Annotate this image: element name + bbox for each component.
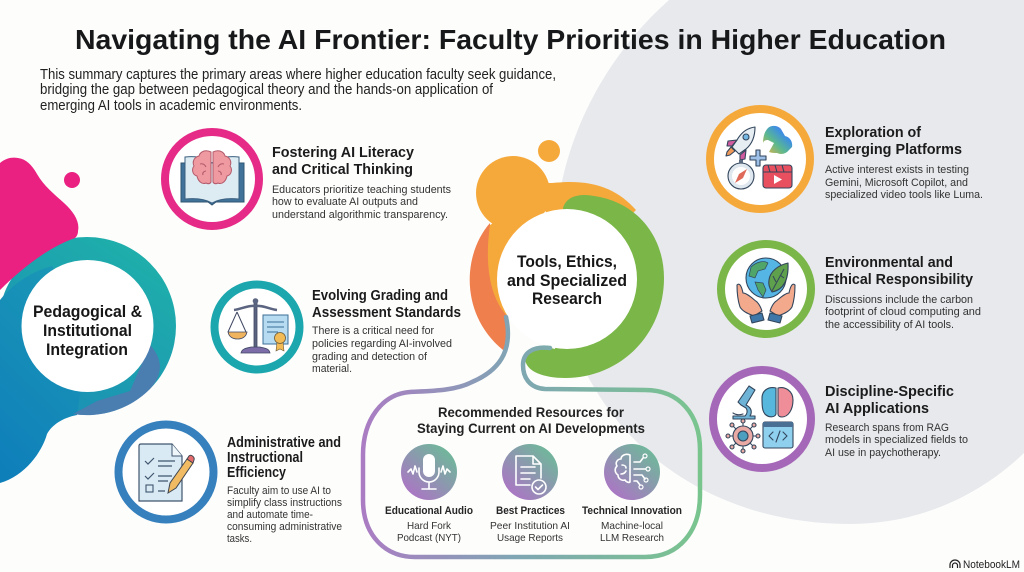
card: Discipline-Specific AI Applications: AI use in paychotherapy.	[825, 447, 941, 459]
card: Administrative Efficiency: Efficiency	[227, 465, 286, 481]
card: Discipline-Specific AI Applications: Research spans from RAG	[825, 422, 949, 434]
card: Fostering AI Literacy: Educators prioritize teaching students	[272, 184, 451, 196]
card: Administrative Efficiency: Instructional	[227, 450, 303, 466]
icon: globe, leaf and hands	[721, 244, 811, 334]
resource: educational audio	[385, 444, 473, 544]
card: Evolving Grading: material.	[312, 363, 352, 375]
resource: best practices	[490, 444, 570, 544]
card: Exploration of Emerging Platforms: specialized video tools like Luma.	[825, 189, 983, 201]
card: Exploration of Emerging Platforms: Emerging Platforms	[825, 142, 962, 158]
card: Discipline-Specific AI Applications	[713, 370, 968, 468]
resource: best practices: Best Practices	[496, 505, 565, 517]
card: Administrative Efficiency: consuming administrative	[227, 521, 342, 533]
card: Fostering AI Literacy: how to evaluate AI outputs and	[272, 196, 418, 208]
resource: technical innovation: Technical Innovation	[582, 505, 682, 517]
panel heading: Recommended Resources for	[438, 405, 625, 420]
hub: Tools, Ethics, and Specialized Research: and Specialized	[507, 271, 627, 290]
card: Exploration of Emerging Platforms: Exploration of	[825, 125, 921, 141]
resource: technical innovation: LLM Research	[600, 532, 664, 544]
card: Environmental and Ethical Responsibility	[721, 244, 981, 334]
card: Fostering AI Literacy	[165, 132, 451, 226]
hub: Pedagogical & Institutional Integration: Integration	[46, 340, 128, 359]
intro text	[40, 67, 556, 114]
card: Administrative Efficiency: simplify class instructions	[227, 497, 342, 509]
card: Administrative Efficiency: Faculty aim to use AI to	[227, 485, 331, 497]
title: Navigating the AI Frontier: Faculty Priorities in Higher Education	[75, 24, 946, 55]
resource: educational audio: Podcast (NYT)	[397, 532, 461, 544]
card: Discipline-Specific AI Applications: models in specialized fields to	[825, 434, 968, 446]
hub: Tools, Ethics, and Specialized Research	[470, 140, 664, 378]
resource: best practices: Peer Institution AI	[490, 520, 570, 532]
icon: brain and book	[165, 132, 259, 226]
card: Evolving Grading: grading and detection of	[312, 351, 428, 363]
resource: best practices: Usage Reports	[497, 532, 563, 544]
card: Discipline-Specific AI Applications: Discipline-Specific	[825, 384, 954, 400]
card: Environmental and Ethical Responsibility: Discussions include the carbon	[825, 294, 973, 306]
panel heading: Staying Current on AI Developments	[417, 421, 645, 436]
card: Administrative Efficiency	[118, 424, 342, 545]
card: Administrative Efficiency: tasks.	[227, 533, 252, 545]
card: Environmental and Ethical Responsibility: Environmental and	[825, 255, 953, 271]
resource: educational audio: Hard Fork	[407, 520, 452, 532]
gray backdrop shape	[556, 0, 1024, 524]
card: Environmental and Ethical Responsibility: Ethical Responsibility	[825, 272, 973, 288]
intro text: emerging AI tools in academic environments.	[40, 98, 302, 114]
resource: educational audio: Educational Audio	[385, 505, 473, 517]
watermark: NotebookLM: NotebookLM	[963, 559, 1020, 571]
card: Environmental and Ethical Responsibility: the accessibility of AI tools.	[825, 319, 954, 331]
card: Environmental and Ethical Responsibility: footprint of cloud computing and	[825, 306, 981, 318]
hub: Tools, Ethics, and Specialized Research: Tools, Ethics,	[517, 252, 617, 271]
hub: Pedagogical & Institutional Integration: Institutional	[43, 321, 132, 340]
panel outline connector	[363, 317, 700, 557]
icon: checklist and pencil	[118, 424, 214, 520]
card: Evolving Grading: policies regarding AI-involved	[312, 338, 452, 350]
intro text: bridging the gap between pedagogical theory and the hands-on application of	[40, 82, 494, 98]
card: Evolving Grading	[214, 284, 461, 375]
card: Administrative Efficiency: and automate time-	[227, 509, 313, 521]
intro text: This summary captures the primary areas where higher education faculty seek guidance,	[40, 67, 556, 83]
icon: scales and certificate	[214, 284, 300, 370]
card: Exploration of Emerging Platforms: Gemini, Microsoft Copilot, and	[825, 177, 968, 189]
resource: technical innovation: Machine-local	[601, 520, 663, 532]
card: Fostering AI Literacy: understand algorithmic transparency.	[272, 209, 448, 221]
hub: Tools, Ethics, and Specialized Research: Research	[532, 289, 602, 308]
card: Fostering AI Literacy: and Critical Thinking	[272, 162, 413, 178]
card: Discipline-Specific AI Applications: AI Applications	[825, 401, 929, 417]
card: Fostering AI Literacy: Fostering AI Literacy	[272, 145, 414, 161]
card: Evolving Grading: Assessment Standards	[312, 305, 461, 321]
resource: technical innovation	[582, 444, 682, 544]
card: Exploration of Emerging Platforms	[710, 109, 983, 209]
icon: rocket, copilot, compass, video	[710, 109, 810, 209]
hub: Pedagogical & Institutional Integration: Pedagogical &	[33, 302, 142, 321]
card: Administrative Efficiency: Administrative and	[227, 435, 341, 451]
card: Evolving Grading: Evolving Grading and	[312, 288, 448, 304]
hub: Pedagogical & Institutional Integration	[0, 158, 176, 483]
panel: recommended resources	[363, 317, 700, 557]
icon: microscope, brain, network, code	[713, 370, 811, 468]
card: Evolving Grading: There is a critical need for	[312, 325, 434, 337]
card: Exploration of Emerging Platforms: Active interest exists in testing	[825, 164, 969, 176]
panel heading	[417, 405, 645, 436]
